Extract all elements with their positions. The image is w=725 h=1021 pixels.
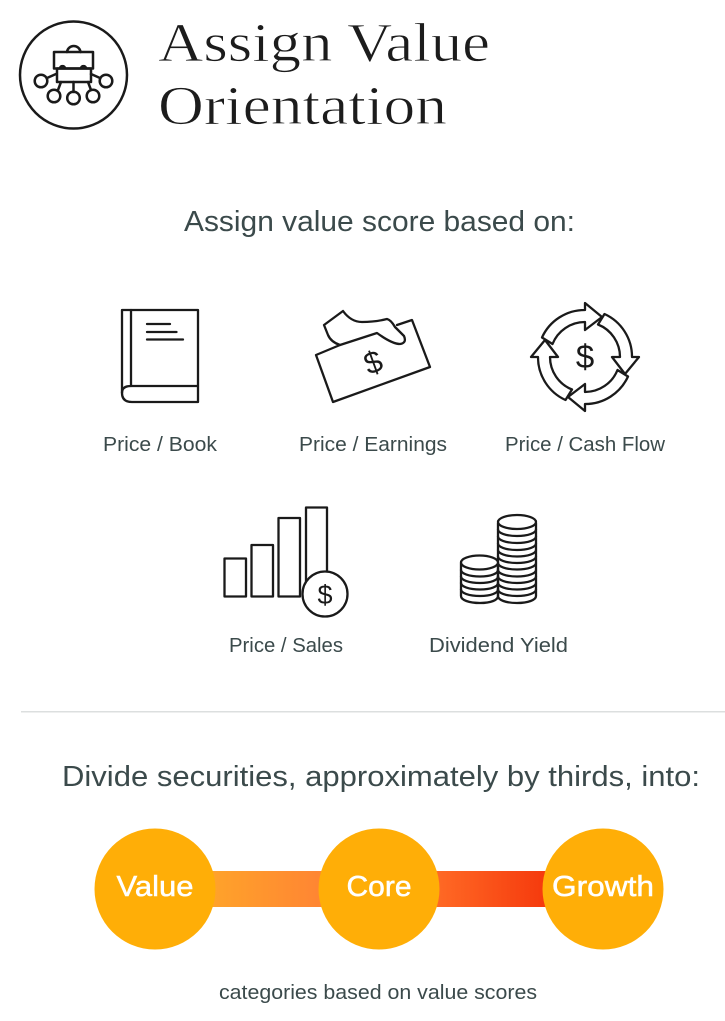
caption: categories based on value scores — [219, 982, 537, 1004]
label: price / sales: Price / Sales — [229, 635, 343, 657]
category: value: Value — [116, 871, 194, 903]
title: Assign Value — [158, 12, 490, 73]
icon: bar chart with dollar coin: $ — [317, 580, 333, 610]
icon: circular arrows with dollar — [531, 303, 639, 411]
icon: coin stacks — [461, 515, 536, 603]
label: price / earnings: Price / Earnings — [299, 434, 447, 456]
category: core — [318, 828, 440, 950]
icon: portfolio network badge — [20, 22, 127, 128]
icon: bar chart with dollar coin — [224, 508, 348, 616]
connector: core to growth — [430, 871, 555, 907]
icon: hand with banknote: $ — [359, 343, 387, 382]
heading: assign value score: Assign value score based on: — [184, 206, 575, 238]
label: dividend yield: Dividend Yield — [429, 635, 568, 657]
label: price / book: Price / Book — [103, 434, 218, 456]
category: growth — [542, 828, 664, 950]
connector: value to core — [205, 871, 330, 907]
title: Orientation — [158, 75, 447, 136]
category: growth: Growth — [552, 871, 654, 903]
icon: book — [122, 310, 198, 402]
diagram: value core growth spectrum — [94, 828, 664, 950]
category: value — [94, 828, 216, 950]
category: core: Core — [346, 871, 412, 903]
icon: circular arrows with dollar: $ — [576, 338, 594, 375]
icon: hand with banknote — [316, 311, 430, 402]
title — [158, 12, 490, 136]
heading: divide securities: Divide securities, approximately by thirds, into: — [62, 761, 700, 793]
label: price / cash flow: Price / Cash Flow — [505, 434, 666, 456]
